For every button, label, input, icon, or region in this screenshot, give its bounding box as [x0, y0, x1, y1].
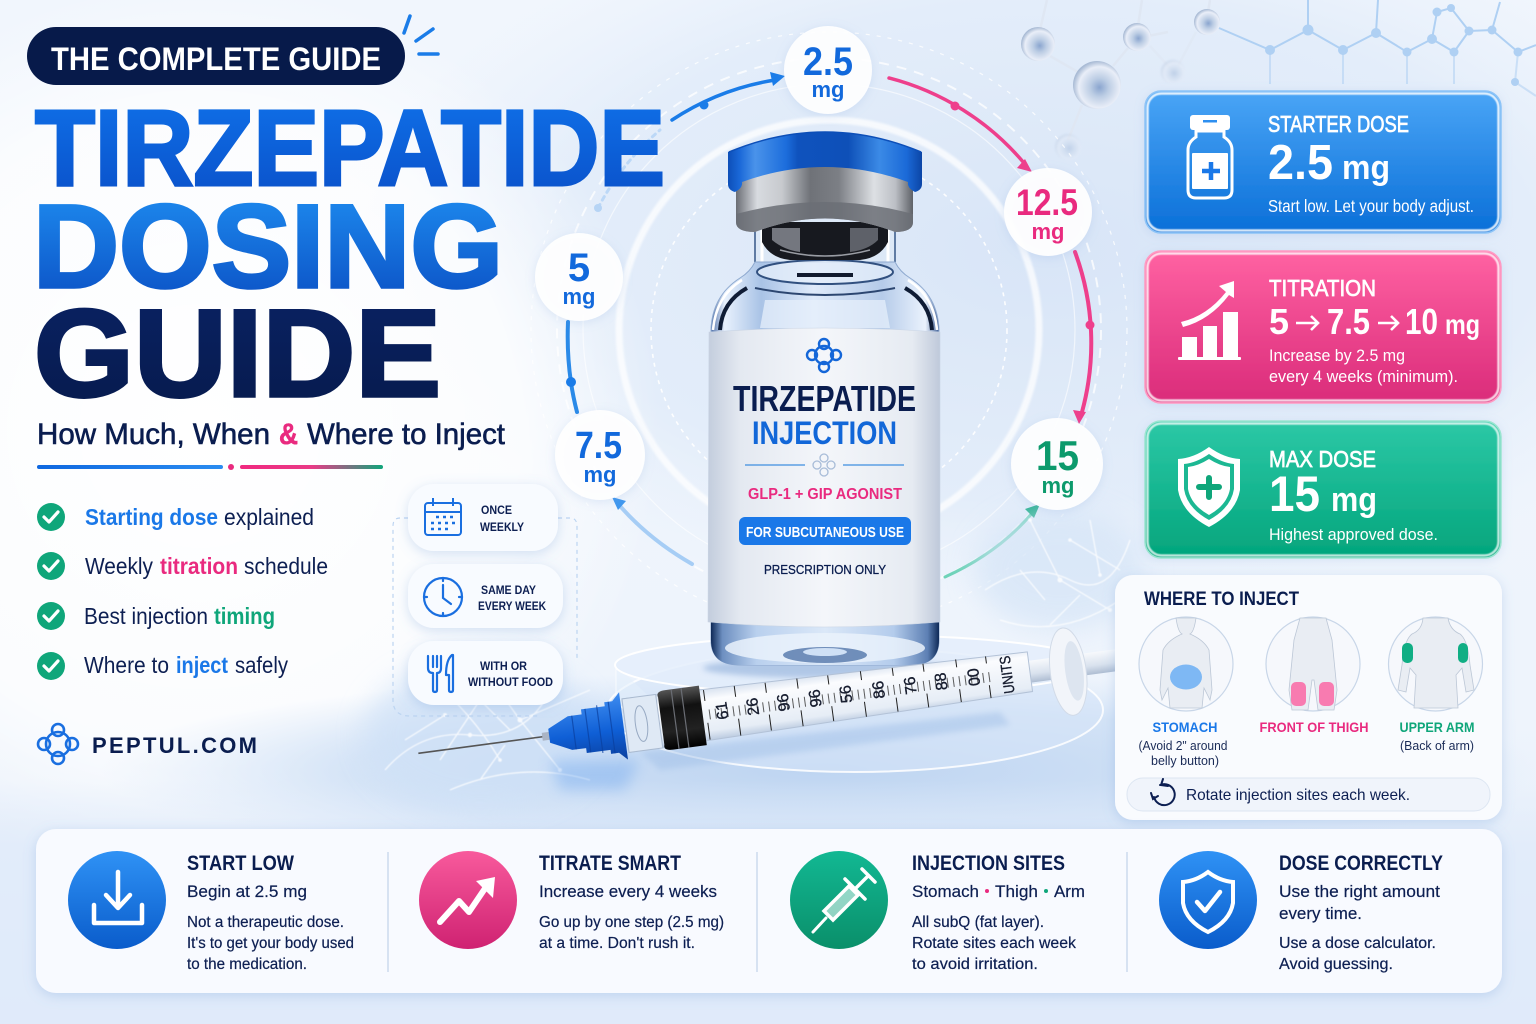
title — [33, 87, 665, 423]
note: start low: Start low. Let your body adjust. — [1268, 196, 1474, 216]
pill: with or without food: WITHOUT FOOD — [468, 675, 553, 689]
tip: dose correctly: Avoid guessing. — [1279, 956, 1393, 973]
glass body — [711, 262, 939, 665]
panel: max dose — [1145, 421, 1501, 558]
scale numbers: 96 — [806, 688, 826, 708]
header pill: THE COMPLETE GUIDE — [51, 41, 381, 77]
check item: inject: safely — [235, 652, 288, 678]
title: GUIDE — [34, 285, 441, 423]
value: 2.5 mg: mg — [1342, 149, 1390, 187]
site: stomach: STOMACH — [1152, 719, 1218, 735]
tip: start low — [68, 851, 354, 973]
tip: injection sites: Rotate sites each week — [912, 935, 1076, 952]
vial — [708, 132, 940, 665]
icon: rising chart — [1178, 281, 1241, 360]
icon: shield check — [1159, 851, 1257, 949]
value: dose steps: 5 — [1269, 301, 1289, 342]
title: DOSING — [33, 181, 503, 313]
tick marks — [702, 652, 996, 740]
check item: starting dose — [37, 503, 314, 531]
dose node 15 mg — [1011, 418, 1103, 510]
tip: dose correctly — [1159, 851, 1443, 973]
label logo — [807, 339, 841, 372]
subtitle: & — [279, 418, 298, 451]
rotate note: Rotate injection sites each week. — [1186, 787, 1410, 804]
tip: titrate smart: at a time. Don't rush it. — [539, 935, 695, 952]
label: titration: TITRATION — [1269, 275, 1376, 301]
scale numbers: 00 — [965, 667, 984, 687]
plunger rod — [1024, 648, 1131, 683]
check item: inject — [37, 652, 288, 680]
scale numbers: 86 — [870, 680, 889, 700]
icon: syringe — [790, 851, 888, 949]
units label: UNITS — [997, 655, 1019, 695]
panel: where to inject — [1115, 575, 1502, 820]
sparks — [404, 16, 438, 54]
pill: once weekly: WEEKLY — [480, 520, 524, 534]
icon: clock — [424, 578, 462, 616]
scale numbers: 61 — [713, 701, 732, 721]
tip: dose correctly: DOSE CORRECTLY — [1279, 852, 1443, 875]
pill: same day every week — [408, 564, 563, 628]
rotate note — [1127, 778, 1490, 811]
value: 2.5 mg — [1268, 136, 1390, 190]
dose node 5 mg: mg — [562, 284, 596, 309]
check item: titration: titration — [160, 553, 238, 579]
site: stomach: (Avoid 2" around — [1138, 738, 1228, 753]
scale numbers — [713, 667, 984, 721]
check item: titration: Weekly — [85, 553, 153, 579]
label name: TIRZEPATIDE — [733, 378, 916, 419]
value: dose steps: 10 — [1405, 301, 1438, 342]
glass neck — [752, 225, 902, 276]
label: starter dose: STARTER DOSE — [1268, 111, 1409, 137]
dashed connector — [393, 518, 577, 716]
check item: starting dose: Starting dose — [85, 504, 218, 530]
subcutaneous badge: FOR SUBCUTANEOUS USE — [746, 524, 904, 541]
pill: once weekly: ONCE — [481, 503, 512, 517]
dose node 12.5 mg — [1004, 168, 1092, 256]
subtitle — [37, 418, 506, 451]
site: upper arm: (Back of arm) — [1400, 738, 1474, 753]
tip: injection sites: Thigh — [995, 882, 1038, 901]
pill: same day every week: EVERY WEEK — [478, 599, 546, 613]
value: 15 mg: mg — [1331, 481, 1377, 519]
dose node 15 mg: 15 — [1036, 432, 1079, 479]
check item: starting dose: explained — [224, 504, 314, 530]
dose node 12.5 mg: 12.5 — [1016, 182, 1078, 223]
tip: injection sites: Stomach — [912, 882, 979, 901]
dose node 7.5 mg: mg — [584, 462, 616, 487]
dose node 12.5 mg: mg — [1032, 219, 1064, 244]
label divider — [745, 454, 904, 476]
subtitle rule — [37, 464, 383, 470]
site: stomach — [1138, 617, 1233, 768]
glass base — [711, 620, 939, 665]
tip: start low: Not a therapeutic dose. — [187, 914, 344, 931]
subcutaneous badge — [739, 517, 911, 545]
scale numbers: 96 — [775, 692, 794, 712]
hexagon lattice — [1219, 0, 1536, 96]
pill: with or without food — [408, 641, 563, 705]
tip: injection sites — [790, 851, 1085, 973]
prescription text: PRESCRIPTION ONLY — [764, 562, 886, 577]
vial label — [708, 328, 940, 627]
check item: timing — [37, 602, 275, 630]
tip: injection sites: All subQ (fat layer). — [912, 914, 1044, 931]
agonist text: GLP-1 + GIP AGONIST — [748, 486, 902, 503]
site: front of thigh — [1260, 617, 1368, 735]
pill: same day every week: SAME DAY — [481, 583, 536, 597]
checklist — [37, 503, 328, 680]
panel: bottom summary — [36, 829, 1502, 993]
reflections — [550, 760, 640, 790]
brand logo: PEPTUL.COM — [92, 733, 257, 758]
dose node 2.5 mg — [784, 26, 872, 114]
needle — [418, 736, 548, 753]
brand logo — [38, 724, 257, 764]
dose node 5 mg: 5 — [568, 246, 590, 290]
molecule decoration — [1021, 0, 1536, 160]
check item: timing: timing — [214, 603, 275, 629]
label subtitle: INJECTION — [752, 415, 897, 451]
note: increase: every 4 weeks (minimum). — [1269, 367, 1458, 386]
value: 15 mg — [1269, 466, 1377, 522]
stopper — [762, 222, 888, 260]
value: dose steps — [1269, 301, 1480, 342]
check item: inject: inject — [176, 652, 228, 678]
icon: fork and knife — [428, 655, 453, 692]
tip: injection sites: Arm — [1054, 882, 1085, 901]
pill: with or without food: WITH OR — [480, 659, 527, 673]
value: 2.5 mg: 2.5 — [1268, 136, 1333, 190]
arrow: 2.5 to 12.5 mg — [889, 78, 1032, 172]
check item: inject: Where to — [84, 652, 169, 678]
note: increase: Increase by 2.5 mg — [1269, 346, 1405, 365]
icon: calendar — [425, 498, 461, 535]
note: increase — [1269, 346, 1458, 386]
tip: titrate smart: Go up by one step (2.5 mg) — [539, 914, 724, 931]
site: upper arm — [1388, 617, 1482, 753]
dose node 7.5 mg: 7.5 — [575, 425, 622, 467]
check item: timing: Best injection — [84, 603, 208, 629]
floor and glass platform — [550, 635, 1103, 790]
tip: dose correctly: every time. — [1279, 904, 1362, 923]
icon: shield — [1178, 447, 1240, 527]
icon: trending arrow — [419, 851, 517, 949]
glow rings around vial — [531, 32, 1127, 628]
pill: once weekly — [408, 484, 558, 551]
arrow: 12.5 to 15 mg — [1073, 252, 1094, 424]
dose node 2.5 mg: 2.5 — [803, 40, 853, 84]
arrow: 5 to 2.5 mg — [594, 72, 785, 212]
header pill — [27, 27, 405, 85]
crimp — [736, 160, 913, 232]
arrow: 15 mg to vial — [945, 512, 1033, 577]
dose node 7.5 mg — [555, 410, 645, 500]
icon: vial — [1188, 115, 1232, 198]
heading: where to inject: WHERE TO INJECT — [1144, 589, 1299, 610]
tip: titrate smart: TITRATE SMART — [539, 852, 681, 875]
tip: titrate smart — [419, 851, 724, 952]
subtitle: Where to Inject — [307, 418, 506, 451]
tip: start low: Begin at 2.5 mg — [187, 882, 307, 901]
value: dose steps: 7.5 — [1327, 301, 1370, 342]
silver spheres — [1040, 0, 1210, 140]
title: TIRZEPATIDE — [35, 87, 665, 208]
subtitle: How Much, When — [37, 418, 270, 451]
tip: start low: It's to get your body used — [187, 935, 354, 952]
check item: titration — [37, 552, 328, 580]
label: max dose: MAX DOSE — [1269, 446, 1376, 472]
site: front of thigh: FRONT OF THIGH — [1260, 719, 1368, 735]
barrel — [622, 645, 1033, 752]
major ticks — [703, 652, 992, 740]
scale numbers: 76 — [902, 675, 921, 695]
tip: start low: START LOW — [187, 852, 294, 875]
tip: injection sites: to avoid irritation. — [912, 956, 1038, 973]
scale numbers: 56 — [837, 684, 856, 704]
syringe — [413, 620, 1136, 802]
value: 15 mg: 15 — [1269, 466, 1320, 522]
needle hub — [545, 692, 628, 770]
tip: dose correctly: Use the right amount — [1279, 882, 1440, 901]
panel: starter dose — [1145, 91, 1501, 233]
dose node 15 mg: mg — [1042, 473, 1074, 498]
panel: titration — [1145, 251, 1501, 403]
check item: titration: schedule — [244, 553, 328, 579]
icon: download — [68, 851, 166, 949]
rubber stopper — [657, 686, 707, 751]
arrow: 7.5 to 5 mg — [566, 322, 577, 412]
tip: titrate smart: Increase every 4 weeks — [539, 882, 717, 901]
scale numbers: 26 — [744, 697, 763, 717]
splash decoration — [365, 510, 1145, 810]
arrow: vial to 7.5 mg — [612, 497, 692, 564]
tip: start low: to the medication. — [187, 956, 307, 973]
tip: injection sites: INJECTION SITES — [912, 852, 1065, 875]
dose node 2.5 mg: mg — [812, 77, 844, 102]
tip: dose correctly: Use a dose calculator. — [1279, 935, 1436, 952]
blue cap — [728, 132, 922, 192]
note: highest: Highest approved dose. — [1269, 525, 1438, 544]
flange — [1045, 626, 1092, 718]
scale numbers: 88 — [932, 671, 952, 691]
shoulder details — [713, 260, 937, 330]
dose cycle arcs and arrows — [566, 72, 1094, 577]
dose node 5 mg — [535, 233, 623, 321]
value: dose steps: mg — [1445, 309, 1480, 340]
site: upper arm: UPPER ARM — [1400, 719, 1474, 735]
site: stomach: belly button) — [1151, 753, 1219, 768]
